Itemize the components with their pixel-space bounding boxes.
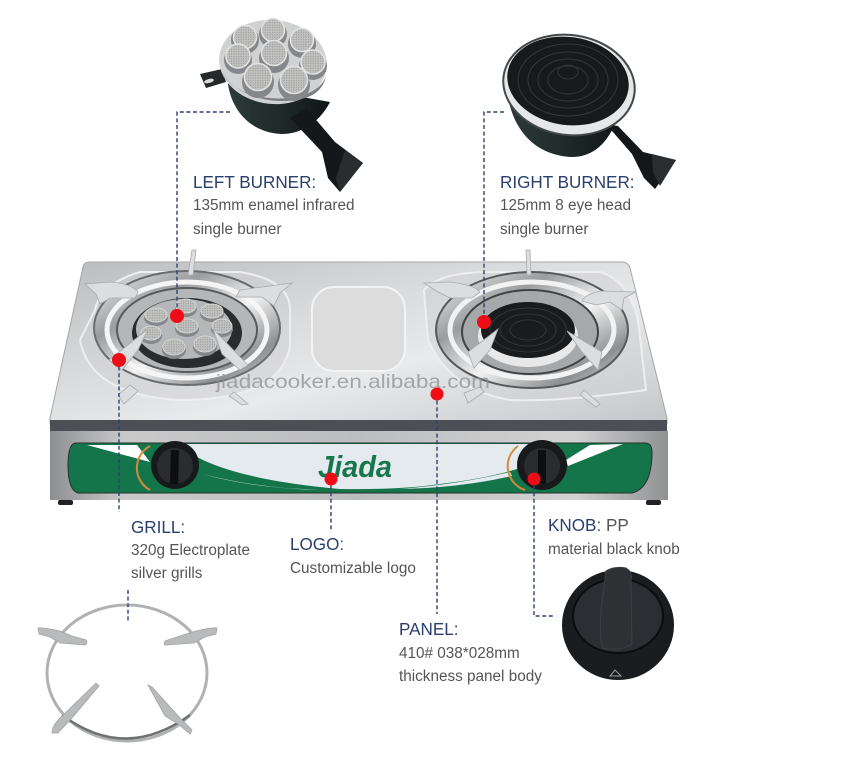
watermark: jiadacooker.en.alibaba.com [215,371,490,393]
marker: panel [430,388,444,400]
brand logo: Jiada [318,449,392,484]
callout: logo: Customizable logo [290,560,416,577]
leader line: panel [436,394,438,614]
callout: right burner: single burner [500,221,588,238]
right knob on stove [508,440,567,490]
grill product photo [38,590,217,741]
callout: grill: silver grills [131,565,203,582]
dark front edge [50,420,667,431]
centre recessed panel [312,287,405,371]
leader line: logo [330,479,332,532]
right burner product photo [497,26,676,189]
callout: grill: GRILL: [131,518,185,537]
callout: panel: 410# 038*028mm [399,645,520,662]
grill arms [424,250,636,407]
left knob on stove [137,441,199,490]
callout: grill [131,518,250,582]
callout: knob: KNOB: PP [548,516,629,535]
grill arms [85,250,292,405]
callout: panel [399,620,542,685]
stove body [50,262,668,505]
right burner on stove [424,250,646,407]
left burner product photo [200,15,363,192]
callout: right burner: RIGHT BURNER: [500,173,635,192]
front panel [50,431,668,500]
callout: logo: LOGO: [290,535,344,554]
knob product photo [562,567,674,680]
callout: panel: PANEL: [399,620,459,639]
left burner on stove [80,250,292,405]
callout: right burner [500,173,635,238]
marker: grill [112,353,126,367]
callout: left burner: 135mm enamel infrared [193,197,355,214]
marker: logo [324,472,338,486]
leader line: left burner [177,112,230,316]
callout: left burner [193,173,355,238]
callout: knob: material black knob [548,541,680,558]
callout: logo [290,535,416,577]
callout: right burner: 125mm 8 eye head [500,197,631,214]
leader line: right burner [484,112,504,322]
feet [58,500,73,505]
callout: knob [548,516,680,558]
callout: grill: 320g Electroplate [131,542,250,559]
green control strip [68,443,652,493]
marker: knob [528,472,540,486]
stove top plate [50,262,667,424]
marker: left burner [170,309,184,323]
callout: panel: thickness panel body [399,668,542,685]
leader line: grill [118,360,120,512]
callout: left burner: LEFT BURNER: [193,173,316,192]
burner heads [140,299,233,359]
callout: left burner: single burner [193,221,281,238]
burner heads [224,18,327,101]
leader line: knob [534,479,555,616]
marker: right burner [477,315,491,329]
